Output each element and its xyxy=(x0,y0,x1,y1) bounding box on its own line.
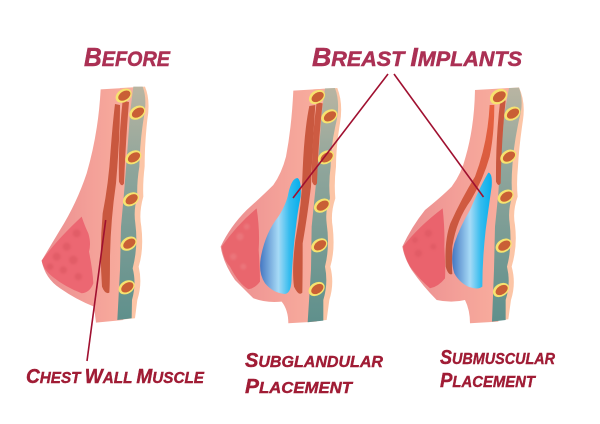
muscle minor xyxy=(119,101,129,185)
gland lobules xyxy=(47,229,82,280)
heading: before: BEFORE xyxy=(84,42,171,72)
muscle major xyxy=(445,105,494,274)
label: subglandular placement xyxy=(245,350,383,398)
muscle minor xyxy=(496,100,506,185)
ribs xyxy=(113,86,148,297)
label: subglandular placement: PLACEMENT xyxy=(245,376,353,398)
label: submuscular placement: PLACEMENT xyxy=(440,370,536,392)
panel: subglandular xyxy=(221,87,341,323)
panel: submuscular xyxy=(402,86,524,323)
skin strip xyxy=(488,87,524,322)
implant xyxy=(452,173,492,288)
label: submuscular placement xyxy=(440,347,555,392)
implant xyxy=(260,178,301,294)
mammary gland xyxy=(42,217,93,293)
muscle minor xyxy=(312,102,323,185)
muscle major xyxy=(293,105,315,294)
rib band xyxy=(117,87,145,320)
skin strip xyxy=(307,88,341,322)
gland lobules xyxy=(230,224,250,270)
mammary gland xyxy=(222,208,260,289)
heading: breast implants: BREAST IMPLANTS xyxy=(312,42,522,72)
breast body xyxy=(402,88,510,323)
breast body xyxy=(42,87,135,323)
label: submuscular placement: SUBMUSCULAR xyxy=(440,347,555,369)
ribs xyxy=(306,87,340,299)
label: subglandular placement: SUBGLANDULAR xyxy=(245,350,383,372)
mammary gland xyxy=(403,208,445,288)
pointer: chest wall muscle xyxy=(87,220,106,361)
pointer: subglandular implant xyxy=(293,74,388,198)
muscle major xyxy=(101,104,120,293)
rib band xyxy=(308,88,338,322)
rib band xyxy=(492,88,522,322)
label: chest wall muscle: CHEST WALL MUSCLE xyxy=(26,366,205,388)
pointer: submuscular implant xyxy=(394,74,484,197)
panel: before xyxy=(42,86,149,323)
gland lobules xyxy=(412,230,436,257)
breast body xyxy=(221,89,327,323)
ribs xyxy=(487,86,523,300)
skin strip xyxy=(117,87,149,320)
